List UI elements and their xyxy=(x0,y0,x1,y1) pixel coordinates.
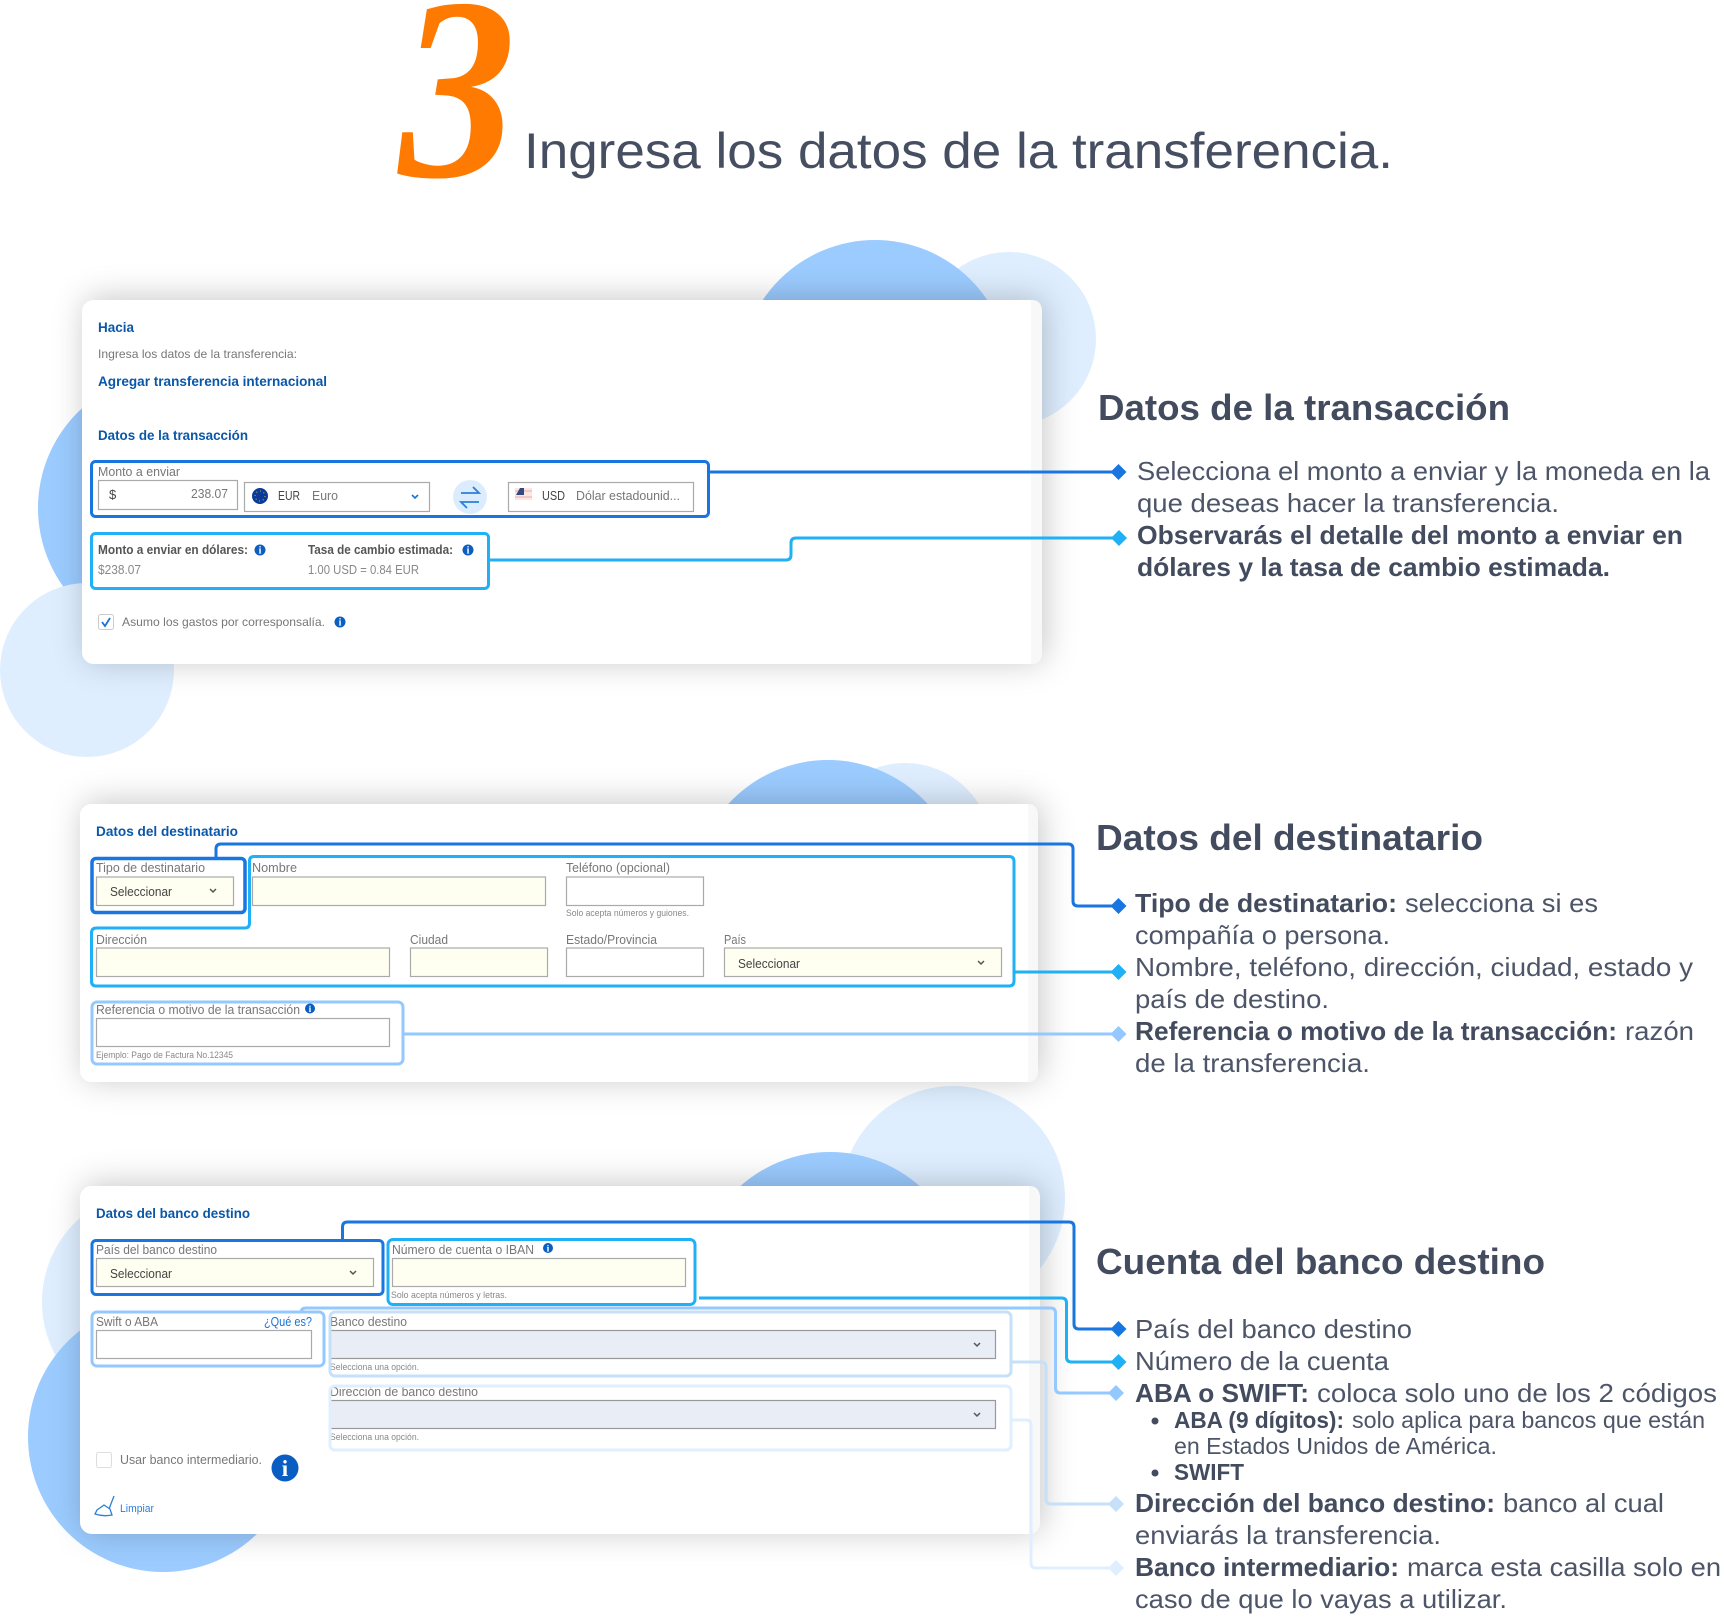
connector: bank name xyxy=(1011,1362,1124,1512)
panel: recipient form: País xyxy=(724,932,746,947)
panel: recipient form: Ciudad xyxy=(410,932,448,947)
highlight box: transaction reference xyxy=(92,1002,403,1064)
text block: transaction data: Observarás el detalle del monto a enviar en xyxy=(1137,520,1683,550)
text block: destination bank account: Número de la cuenta xyxy=(1135,1346,1390,1376)
text block: recipient data: razón xyxy=(1625,1016,1694,1046)
highlight box: amount in dollars and rate xyxy=(92,534,488,588)
text block: destination bank account: solo aplica para bancos que están xyxy=(1352,1407,1705,1433)
highlight box: name and address fields xyxy=(92,856,1014,986)
connector: rate to text xyxy=(489,530,1127,560)
panel: recipient form: i xyxy=(309,1005,312,1015)
panel: destination bank form: Selecciona una opción. xyxy=(330,1432,419,1442)
panel: transaction form: $238.07 xyxy=(98,563,141,577)
connector: reference xyxy=(403,1026,1126,1042)
panel: transaction form: i xyxy=(467,546,470,556)
connector: amount to text xyxy=(710,464,1126,480)
panel: destination bank form: Datos del banco destino xyxy=(96,1205,250,1221)
text block: destination bank account: caso de que lo vayas a utilizar. xyxy=(1135,1584,1507,1614)
panel: destination bank form: Solo acepta números y letras. xyxy=(391,1290,507,1300)
text block: transaction data: que deseas hacer la transferencia. xyxy=(1137,488,1559,518)
text block: recipient data: país de destino. xyxy=(1135,984,1329,1014)
panel: recipient form xyxy=(80,804,1038,1082)
decorative circles: section 3 xyxy=(28,1086,1065,1572)
text block: transaction data: Selecciona el monto a enviar y la moneda en la xyxy=(1137,456,1711,486)
text block: recipient data: compañía o persona. xyxy=(1135,920,1390,950)
panel: transaction form: i xyxy=(339,618,342,628)
text block: destination bank account: en Estados Unidos de América. xyxy=(1174,1433,1497,1459)
panel: recipient form: Dirección xyxy=(96,932,147,947)
panel: transaction form: 1.00 USD = 0.84 EUR xyxy=(308,563,419,577)
panel: transaction form: Euro xyxy=(312,488,338,503)
text block: destination bank account: banco al cual xyxy=(1503,1488,1664,1518)
panel: recipient form: Seleccionar xyxy=(738,956,801,971)
panel: transaction form: Ingresa los datos de la transferencia: xyxy=(98,347,297,361)
text block: destination bank account xyxy=(1096,1241,1721,1614)
panel: transaction form: USD xyxy=(542,488,565,503)
panel: transaction form: EUR xyxy=(278,488,300,503)
text block: transaction data: Datos de la transacción xyxy=(1098,387,1510,428)
panel: transaction form: Tasa de cambio estimada: xyxy=(308,543,453,557)
panel: destination bank form: Swift o ABA xyxy=(96,1314,158,1329)
panel: destination bank form: Número de cuenta o IBAN xyxy=(392,1242,534,1257)
highlight box: bank address xyxy=(330,1386,1011,1450)
text block: destination bank account: ABA o SWIFT: xyxy=(1135,1378,1309,1408)
panel: destination bank form: Dirección de banco destino xyxy=(330,1384,478,1399)
text block: recipient data xyxy=(1096,817,1694,1078)
text block: destination bank account: marca esta casilla solo en xyxy=(1407,1552,1721,1582)
panel: recipient form: Seleccionar xyxy=(110,884,173,899)
panel: recipient form: Ejemplo: Pago de Factura No.12345 xyxy=(96,1050,233,1060)
highlight box: swift xyxy=(92,1312,324,1366)
connector: account number xyxy=(699,1298,1126,1370)
decorative circles: section 2 xyxy=(693,760,992,1030)
highlight box: bank name xyxy=(330,1312,1011,1376)
text block: destination bank account: País del banco destino xyxy=(1135,1314,1412,1344)
text block: destination bank account: SWIFT xyxy=(1174,1459,1244,1485)
panel: destination bank form: Limpiar xyxy=(120,1503,154,1515)
panel: recipient form: Referencia o motivo de la transacción xyxy=(96,1002,300,1017)
panel: recipient form: Teléfono (opcional) xyxy=(566,860,670,875)
highlight box: recipient type xyxy=(92,858,245,912)
panel: destination bank form: i xyxy=(547,1244,550,1254)
connector: name and address xyxy=(1014,964,1126,980)
text block: recipient data: Tipo de destinatario: xyxy=(1135,888,1397,918)
highlight box: amount and currencies xyxy=(92,462,708,516)
decorative circles: section 1 xyxy=(0,240,1096,757)
text block: recipient data: Referencia o motivo de la transacción: xyxy=(1135,1016,1617,1046)
text block: destination bank account: enviarás la transferencia. xyxy=(1135,1520,1441,1550)
panel: transaction form: Monto a enviar en dólares: xyxy=(98,543,248,557)
text block: destination bank account: Banco intermediario: xyxy=(1135,1552,1399,1582)
connector: bank address xyxy=(1011,1420,1124,1576)
panel: recipient form: Nombre xyxy=(252,860,297,875)
panel: destination bank form: Usar banco intermediario. xyxy=(120,1453,262,1467)
panel: destination bank form: i xyxy=(282,1456,289,1481)
panel: destination bank form xyxy=(80,1186,1040,1534)
panel: recipient form: Solo acepta números y guiones. xyxy=(566,908,689,918)
text block: transaction data xyxy=(1098,387,1711,582)
text block: transaction data: dólares y la tasa de cambio estimada. xyxy=(1137,552,1610,582)
panel: transaction form: 238.07 xyxy=(191,486,228,501)
panel: recipient form: Estado/Provincia xyxy=(566,932,658,947)
panel: destination bank form: ¿Qué es? xyxy=(264,1314,312,1329)
connector: swift xyxy=(301,1308,1124,1401)
text block: recipient data: selecciona si es xyxy=(1405,888,1598,918)
panel: recipient form: Tipo de destinatario xyxy=(96,860,205,875)
highlight box: bank country xyxy=(92,1240,383,1294)
text block: recipient data: Datos del destinatario xyxy=(1096,817,1483,858)
panel: transaction form: Datos de la transacción xyxy=(98,427,248,443)
panel: destination bank form: Selecciona una opción. xyxy=(330,1362,419,1372)
text block: destination bank account: coloca solo uno de los 2 códigos xyxy=(1317,1378,1717,1408)
panel: transaction form: Hacia xyxy=(98,319,134,335)
panel: destination bank form: Seleccionar xyxy=(110,1266,173,1281)
panel: transaction form: Monto a enviar xyxy=(98,464,181,479)
text block: destination bank account: Dirección del banco destino: xyxy=(1135,1488,1495,1518)
panel: recipient form: Datos del destinatario xyxy=(96,823,238,839)
title: Ingresa los datos de la transferencia. xyxy=(524,123,1393,179)
connector: bank country xyxy=(342,1222,1126,1337)
panel: destination bank form: Banco destino xyxy=(330,1314,407,1329)
panel: transaction form: Asumo los gastos por corresponsalía. xyxy=(122,615,325,629)
panel: transaction form: i xyxy=(259,546,262,556)
panel: transaction form: $ xyxy=(109,487,117,502)
panel: transaction form: Dólar estadounid... xyxy=(576,488,680,503)
panel: transaction form: Agregar transferencia internacional xyxy=(98,373,327,389)
panel: transaction form xyxy=(82,300,1042,664)
panel: destination bank form: País del banco destino xyxy=(96,1242,217,1257)
connector: recipient type xyxy=(216,844,1126,914)
highlight box: account number xyxy=(388,1240,695,1304)
text block: recipient data: de la transferencia. xyxy=(1135,1048,1370,1078)
text block: recipient data: Nombre, teléfono, dirección, ciudad, estado y xyxy=(1135,952,1693,982)
text block: destination bank account: ABA (9 dígitos): xyxy=(1174,1407,1344,1433)
text block: destination bank account: Cuenta del banco destino xyxy=(1096,1241,1545,1282)
